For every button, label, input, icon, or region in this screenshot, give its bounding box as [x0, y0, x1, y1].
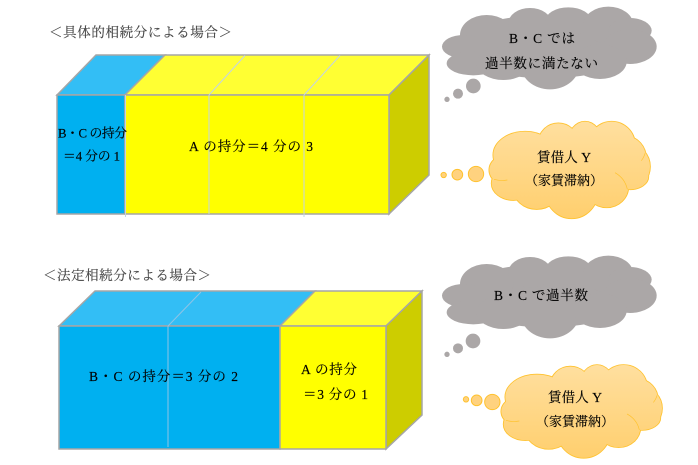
thought cloud: B and C majority [442, 256, 657, 357]
heading: statutory shares: ＜法定相続分による場合＞ [43, 267, 211, 283]
label: A share: A の持分 [301, 361, 358, 377]
label: one quarter: ＝4 分の 1 [63, 150, 120, 164]
cloud text: arrears: （家賃滞納） [536, 414, 614, 429]
cloud text: tenant Y: 賃借人 Y [537, 150, 591, 165]
cloud text line 2: 過半数に満たない [485, 55, 598, 71]
label: one third: ＝3 分の 1 [303, 387, 368, 402]
thought bubbles [463, 394, 500, 410]
thought cloud: tenant Y in arrears [463, 365, 662, 458]
label: B and C share: B・C の持分 [58, 126, 127, 140]
thought cloud: B and C lack majority [442, 7, 657, 102]
label: B and C share: B・C の持分＝3 分の 2 [89, 368, 238, 384]
cloud text: arrears: （家賃滞納） [525, 173, 603, 188]
diagram: specific shares box [57, 55, 429, 217]
cloud text line 1: B・C では [509, 31, 575, 46]
thought cloud: tenant Y in arrears [441, 122, 650, 218]
diagram: statutory shares box [59, 291, 422, 449]
label: A share: A の持分＝4 分の 3 [189, 138, 313, 154]
cloud text: B・C で過半数 [494, 287, 588, 303]
cloud text: tenant Y: 賃借人 Y [548, 390, 602, 405]
heading: specific shares: ＜具体的相続分による場合＞ [49, 24, 232, 40]
